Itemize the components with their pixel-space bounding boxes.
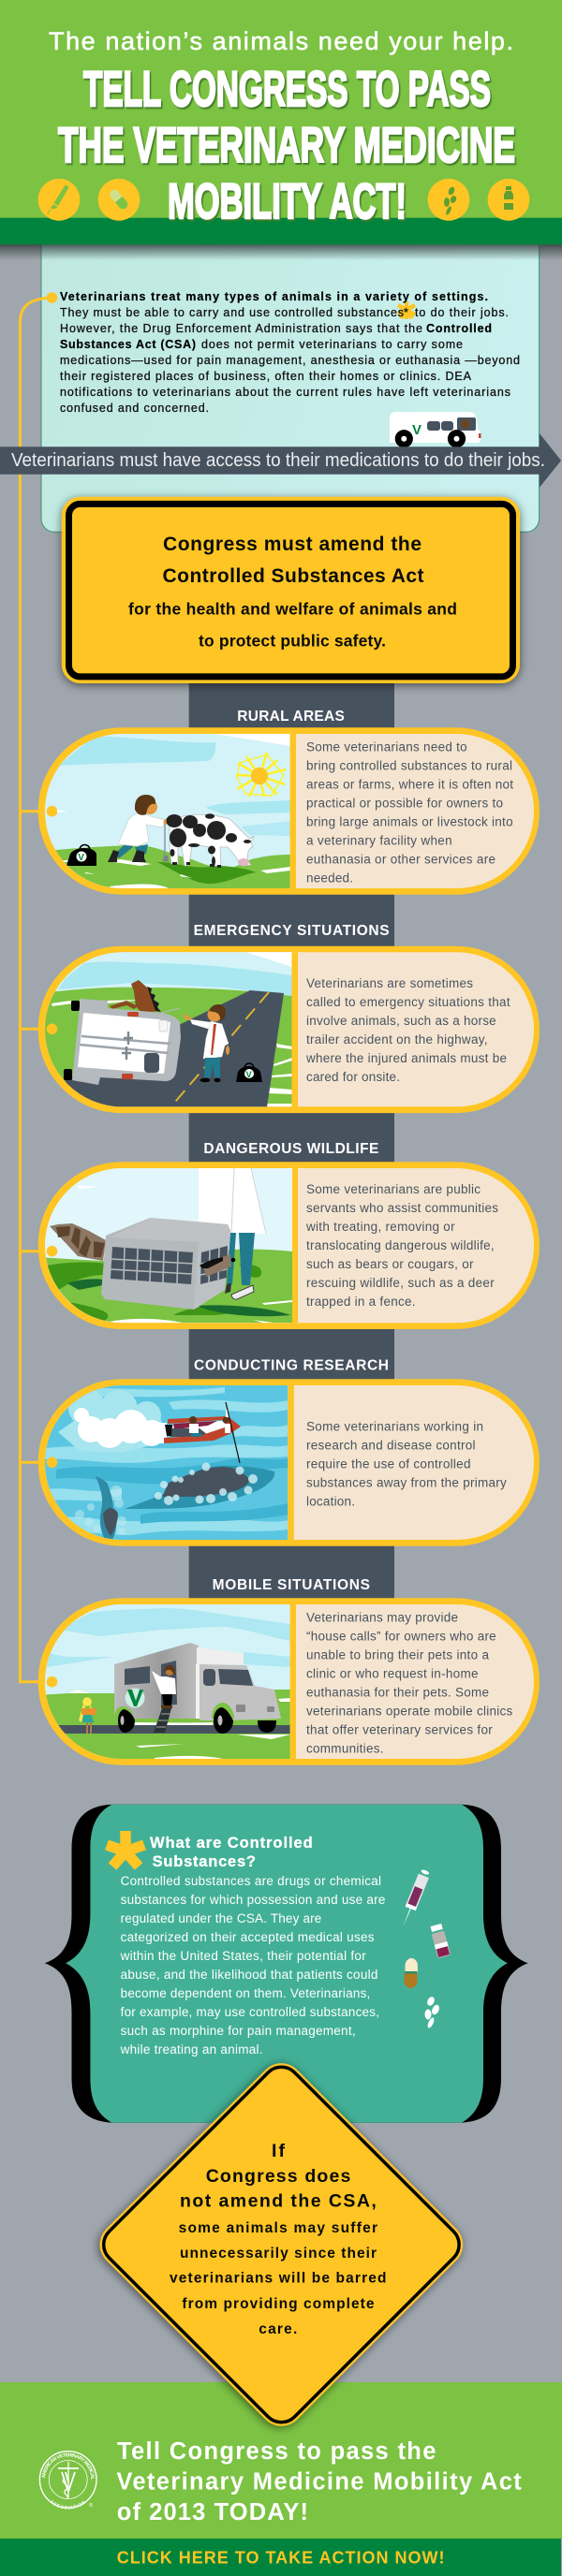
icon: capsule badge	[98, 179, 140, 221]
illustration: caged animal	[37, 1168, 292, 1324]
description text: that offer veterinary services for	[306, 1722, 493, 1736]
panel: intro teal card	[0, 225, 562, 532]
description text: bring controlled substances to rural	[306, 758, 512, 772]
icon: asterisk marker	[398, 301, 415, 319]
sun	[236, 753, 286, 797]
icon: vial	[430, 1924, 451, 1958]
boat	[164, 1402, 241, 1463]
divider	[292, 1168, 298, 1323]
body text	[120, 1874, 385, 2056]
panel: central dark column	[189, 655, 394, 1603]
description text: Some veterinarians are public	[306, 1182, 481, 1196]
intro text: confused and concerned.	[60, 402, 209, 415]
black braces	[45, 1805, 528, 2123]
body text: categorized on their accepted medical uses	[121, 1930, 375, 1944]
diamond text: veterinarians will be barred	[170, 2271, 386, 2287]
section heading: dangerous wildlife: DANGEROUS WILDLIFE	[203, 1141, 378, 1157]
whale	[125, 1462, 274, 1509]
description text: euthanasia for their pets. Some	[306, 1685, 489, 1699]
body text: within the United States, their potential for	[120, 1949, 366, 1963]
panel: dangerous wildlife	[37, 1162, 540, 1329]
panel: amend sign	[62, 497, 520, 683]
panel: conducting research	[37, 1379, 540, 1546]
description text: unable to bring their pets into a	[306, 1647, 489, 1661]
intro text: their registered places of business, often their homes or clinics. DEA	[60, 370, 472, 383]
description text: Some veterinarians working in	[306, 1419, 483, 1433]
description text	[306, 1610, 513, 1755]
footer band	[0, 2382, 562, 2576]
description text: called to emergency situations that	[306, 995, 510, 1009]
body text: abuse, and the likelihood that patients could	[121, 1968, 377, 1982]
intro text: notifications to veterinarians about the current rules have left veterinarians	[60, 386, 510, 399]
vet	[183, 1004, 229, 1082]
divider	[290, 734, 296, 888]
section heading: conducting research: CONDUCTING RESEARCH	[194, 1357, 389, 1373]
sign text	[128, 534, 457, 651]
timeline dots	[20, 806, 67, 1687]
sign text: Congress must amend the	[163, 534, 422, 555]
bag	[236, 1063, 262, 1082]
section heading: mobile situations: MOBILE SITUATIONS	[213, 1577, 370, 1593]
diamond text: not amend the CSA,	[180, 2191, 377, 2212]
description text	[305, 976, 510, 1084]
divider	[290, 1604, 296, 1759]
icon: pills badge	[428, 179, 469, 221]
diamond text: some animals may suffer	[179, 2220, 377, 2236]
logo seal: AMERICAN VETERINARY MEDICAL	[41, 2452, 95, 2481]
logo seal: ®	[89, 2502, 93, 2509]
divider	[288, 1385, 294, 1540]
action button text: CLICK HERE TO TAKE ACTION NOW!	[117, 2549, 445, 2568]
description text	[306, 739, 513, 885]
section heading: emergency situations: EMERGENCY SITUATIONS	[194, 923, 390, 939]
icon: syringe	[398, 1868, 431, 1929]
cow	[163, 813, 254, 868]
description text	[306, 1419, 507, 1508]
animal tail	[50, 1223, 106, 1261]
description text: communities.	[306, 1741, 384, 1755]
panel: mobile situations	[37, 1598, 540, 1765]
description text: servants who assist communities	[306, 1201, 498, 1215]
description text: cared for onsite.	[306, 1070, 400, 1084]
horse	[110, 980, 180, 1014]
divider	[292, 952, 298, 1106]
heading	[150, 1835, 313, 1870]
description text: clinic or who request in-home	[306, 1666, 478, 1680]
timeline start dot	[47, 292, 57, 303]
call to action text: Tell Congress to pass the	[117, 2438, 436, 2465]
sign text: to protect public safety.	[199, 632, 386, 651]
description text: a veterinary facility when	[306, 833, 452, 847]
diamond text: If	[272, 2141, 285, 2161]
crate	[101, 1218, 235, 1310]
intro text: However, the Drug Enforcement Administration says that the	[60, 322, 422, 335]
intro text: Substances Act (CSA)	[60, 338, 196, 351]
intro text: *	[404, 306, 408, 319]
diamond text: care.	[259, 2321, 297, 2337]
description text: with treating, removing or	[305, 1220, 455, 1234]
tagline: The nation’s animals need your help.	[49, 27, 513, 55]
body text: substances for which possession and use are	[121, 1893, 385, 1907]
timeline connector	[20, 298, 52, 1682]
overturned trailer	[64, 999, 181, 1085]
illustration: trailer accident	[37, 952, 292, 1107]
description text: practical or possible for owners to	[306, 796, 503, 810]
intro text: medications—used for pain management, anesthesia or euthanasia —beyond	[60, 354, 520, 367]
vet on ladder	[152, 1665, 176, 1733]
description text: research and disease control	[306, 1438, 476, 1452]
description text: substances away from the primary	[306, 1475, 507, 1489]
diamond text: from providing complete	[182, 2296, 375, 2312]
icon: capsule	[405, 1958, 418, 1988]
vet coat	[199, 1168, 266, 1299]
illustration: vet with cow	[37, 734, 290, 888]
illustration: mobile clinic truck	[37, 1604, 290, 1760]
truck	[114, 1643, 281, 1734]
description text: Veterinarians may provide	[306, 1610, 458, 1624]
bag: V	[78, 853, 84, 863]
description text: areas or farms, where it is often not	[306, 777, 513, 791]
intro text: does not permit veterinarians to carry some	[201, 338, 463, 351]
vet	[108, 795, 173, 862]
panel: what are controlled substances	[45, 1805, 528, 2123]
logo seal	[39, 2451, 97, 2510]
panel: rural areas	[37, 727, 540, 895]
icon: asterisk	[107, 1831, 144, 1866]
banner arrow: Veterinarians must have access to their medications to do their jobs.	[11, 450, 545, 471]
intro text: to do their jobs.	[415, 306, 509, 319]
description text: Veterinarians are sometimes	[306, 976, 473, 990]
teal body	[66, 1805, 508, 2123]
description text: where the injured animals must be	[305, 1051, 507, 1065]
call to action text: of 2013 TODAY!	[117, 2499, 308, 2525]
description text	[305, 1182, 498, 1309]
whale tail	[75, 1476, 126, 1541]
description text: bring large animals or livestock into	[306, 814, 513, 828]
panel: emergency situations	[37, 946, 540, 1113]
description text: such as bears or cougars, or	[306, 1257, 474, 1271]
intro text: They must be able to carry and use controlled substances	[60, 306, 404, 319]
description text: location.	[306, 1494, 355, 1508]
heading: Substances?	[153, 1853, 256, 1870]
call to action text	[116, 2438, 522, 2525]
girl with cat	[79, 1697, 96, 1734]
body text: while treating an animal.	[120, 2042, 262, 2056]
call to action text: Veterinary Medicine Mobility Act	[116, 2469, 522, 2496]
description text: needed.	[306, 871, 353, 885]
icon: pills	[425, 1996, 440, 2028]
sign text: for the health and welfare of animals and	[128, 600, 457, 619]
illustration: whale research	[37, 1385, 288, 1541]
bag	[67, 844, 96, 866]
banner arrow	[0, 433, 561, 488]
description text: trailer accident on the highway,	[306, 1032, 487, 1046]
description text: trapped in a fence.	[306, 1295, 416, 1309]
body text: Controlled substances are drugs or chemical	[121, 1874, 381, 1888]
icon: vial badge	[488, 179, 529, 221]
warning diamond sign	[91, 2054, 472, 2436]
diamond text: unnecessarily since their	[180, 2246, 377, 2261]
description text: involve animals, such as a horse	[306, 1014, 496, 1028]
heading: What are Controlled	[150, 1835, 313, 1852]
description text: “house calls” for owners who are	[306, 1629, 496, 1643]
sign text: Controlled Substances Act	[163, 565, 423, 587]
intro text: Veterinarians treat many types of animals in a variety of settings.	[60, 290, 488, 303]
title	[58, 62, 515, 229]
intro text: Controlled	[426, 322, 492, 335]
section heading: rural areas: RURAL AREAS	[237, 709, 345, 724]
icon: syringe badge	[38, 179, 80, 221]
bag: V	[245, 1070, 253, 1080]
body text: for example, may use controlled substances,	[121, 2005, 379, 2019]
body text: become dependent on them. Veterinarians,	[121, 1986, 370, 2000]
description text: require the use of controlled	[306, 1456, 470, 1471]
diamond text	[170, 2141, 386, 2337]
intro text	[60, 290, 520, 415]
foam cloud	[58, 1389, 167, 1453]
body text: such as morphine for pain management,	[121, 2024, 356, 2038]
description text: translocating dangerous wildlife,	[306, 1238, 495, 1252]
header band	[0, 0, 562, 244]
body text: regulated under the CSA. They are	[121, 1911, 321, 1925]
description text: rescuing wildlife, such as a deer	[306, 1276, 495, 1290]
title: MOBILITY ACT!	[168, 174, 407, 229]
icon: veterinary van	[390, 412, 481, 447]
description text: veterinarians operate mobile clinics	[306, 1704, 513, 1718]
logo seal: ASSOCIATION	[50, 2500, 86, 2510]
description text: Some veterinarians need to	[306, 739, 467, 754]
icon: veterinary van: V	[412, 422, 422, 438]
description text: euthanasia or other services are	[306, 852, 495, 866]
diamond text: Congress does	[206, 2166, 350, 2187]
